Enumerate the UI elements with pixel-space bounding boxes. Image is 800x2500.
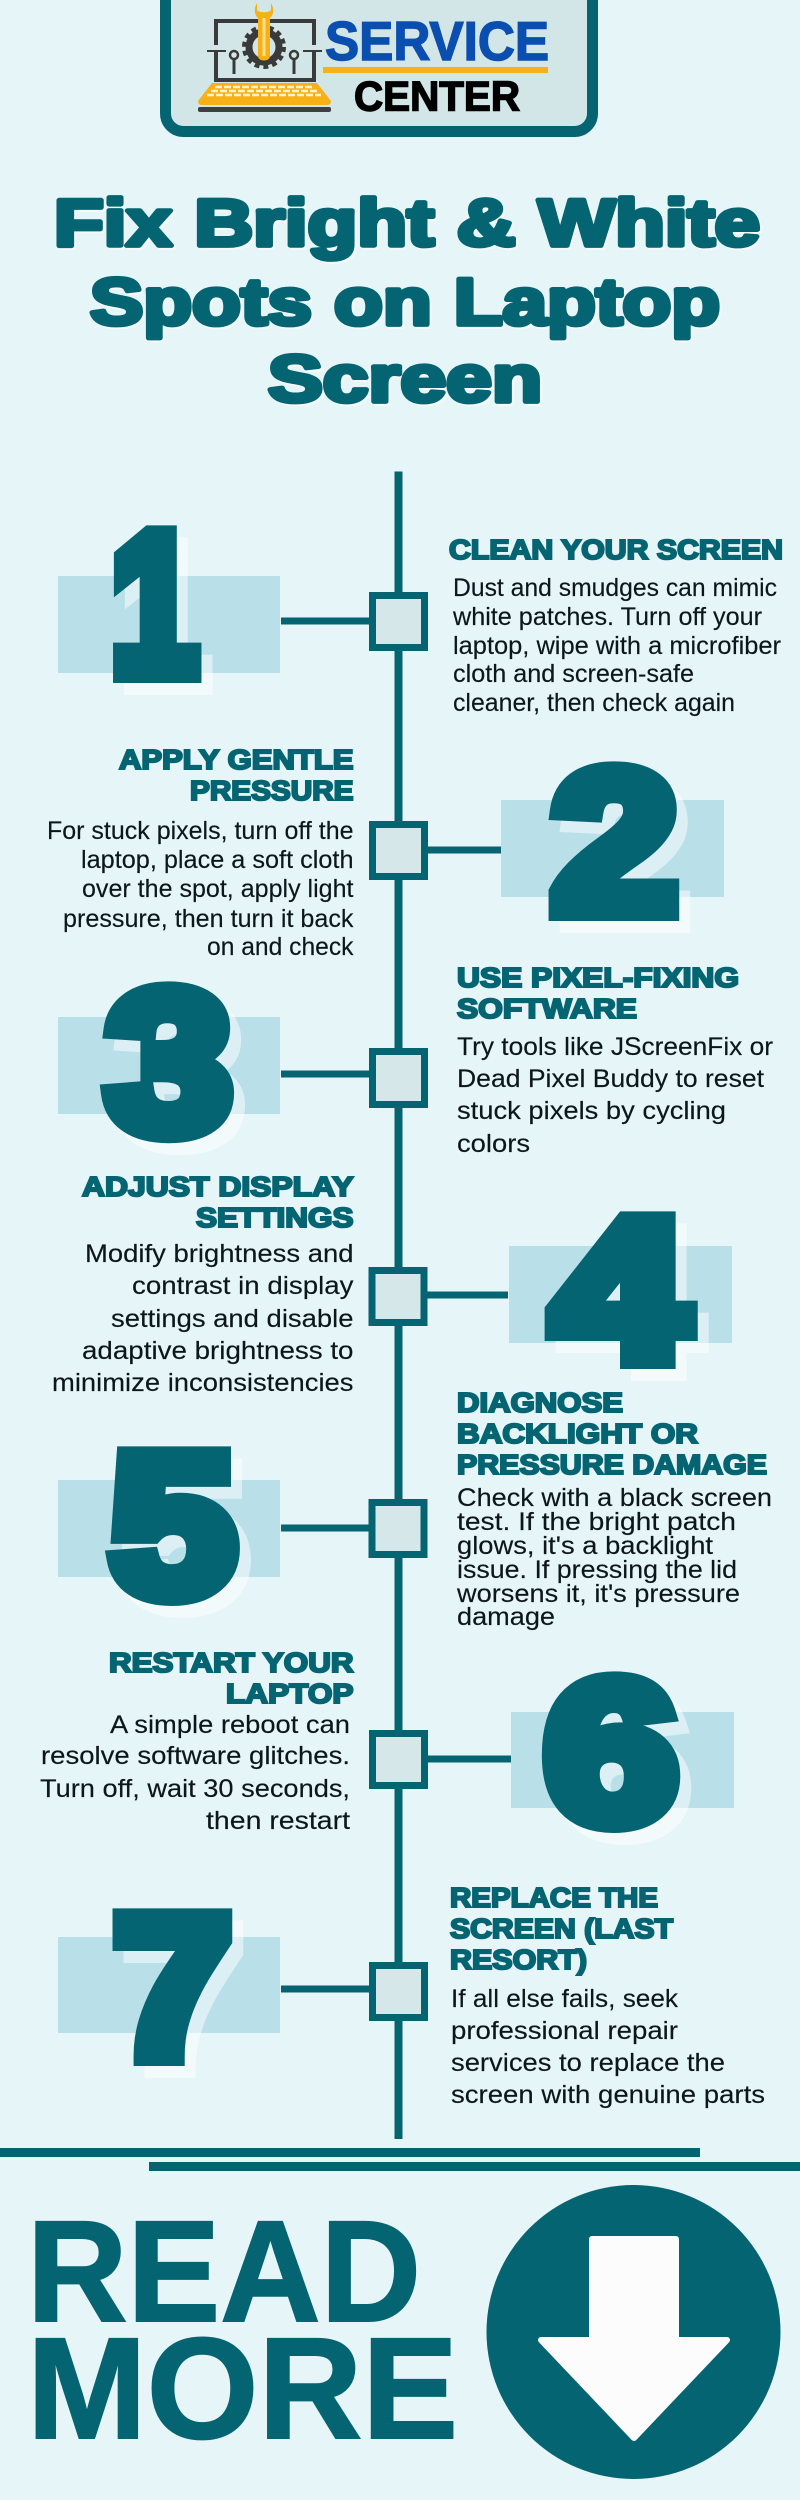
step 1 (58, 493, 783, 717)
heading 5: BACKLIGHT OR (457, 1418, 698, 1449)
body 7: If all else fails, seek (451, 1985, 679, 2013)
body 5: Check with a black screen (457, 1484, 772, 1512)
read more text: MORE (27, 2308, 458, 2469)
body 6: A simple reboot can (110, 1711, 350, 1739)
body 4 (52, 1240, 354, 1397)
read more text: READ (27, 2191, 421, 2352)
body 4: Modify brightness and (85, 1240, 354, 1268)
heading 2: PRESSURE (190, 775, 354, 806)
icon: down arrow in circle (486, 2185, 780, 2479)
node 5 (372, 1502, 424, 1554)
body 3: Try tools like JScreenFix or (457, 1033, 773, 1061)
title: Spots on Laptop (90, 264, 720, 338)
body 4: settings and disable (111, 1305, 354, 1333)
logo gold rule (323, 67, 548, 73)
body 4: minimize inconsistencies (52, 1369, 354, 1397)
timeline vertical line (394, 472, 402, 2139)
step 3 (58, 951, 773, 1174)
number box 6 (511, 1712, 734, 1808)
body 7 (451, 1985, 765, 2109)
number box 4 (509, 1246, 732, 1343)
number 6: 6 (545, 1641, 677, 1864)
body 4: contrast in display (132, 1272, 354, 1300)
number 1: 1 (111, 493, 198, 716)
heading 3 (457, 962, 739, 1024)
body 1: Dust and smudges can mimic (453, 574, 777, 602)
body 1: cleaner, then check again (453, 689, 735, 717)
body 3: colors (457, 1130, 530, 1158)
number box 1 (58, 576, 280, 673)
body 6 (40, 1711, 350, 1835)
connector 5 (281, 1524, 369, 1532)
body 3: stuck pixels by cycling (457, 1097, 726, 1125)
read more text (27, 2191, 458, 2469)
body 1: cloth and screen-safe (453, 660, 694, 688)
connector 6 (428, 1756, 511, 1762)
node 6 (372, 1734, 424, 1786)
number box 2 (501, 800, 724, 897)
number 7: 7 (114, 1876, 231, 2099)
logo badge (166, 0, 592, 132)
title: Fix Bright & White (54, 186, 760, 260)
heading 5: DIAGNOSE (457, 1387, 623, 1418)
heading 3: USE PIXEL-FIXING (457, 962, 739, 993)
step 5 (58, 1387, 772, 1637)
heading 2 (119, 744, 354, 806)
heading 4 (82, 1171, 354, 1233)
number 2: 2 (552, 731, 677, 954)
connector 2 (428, 846, 501, 854)
heading 5 (457, 1387, 767, 1480)
body 2: over the spot, apply light (82, 875, 354, 903)
number box 5 (58, 1480, 280, 1577)
heading 4: ADJUST DISPLAY (82, 1171, 354, 1202)
body 6: Turn off, wait 30 seconds, (40, 1775, 350, 1803)
body 1: laptop, wipe with a microfiber (453, 632, 781, 660)
heading 6: LAPTOP (226, 1678, 354, 1709)
heading 4: SETTINGS (196, 1202, 354, 1233)
heading 7: RESORT) (450, 1944, 587, 1975)
connector 1 (281, 618, 369, 624)
body 2: For stuck pixels, turn off the (47, 817, 354, 845)
body 3 (457, 1033, 773, 1158)
body 5 (456, 1484, 772, 1631)
node 1 (372, 596, 424, 648)
body 6: then restart (206, 1807, 350, 1835)
body 7: services to replace the (451, 2049, 725, 2077)
node 4 (372, 1270, 424, 1322)
body 5: test. If the bright patch (457, 1508, 736, 1536)
logo text: SERVICE: SERVICE (325, 10, 549, 72)
connector 3 (281, 1070, 369, 1078)
heading 7: SCREEN (LAST (450, 1913, 673, 1944)
heading 7: REPLACE THE (450, 1882, 658, 1913)
body 7: professional repair (451, 2017, 678, 2045)
heading 6: RESTART YOUR (109, 1647, 354, 1678)
body 5: worsens it, it's pressure (456, 1580, 740, 1608)
body 2: laptop, place a soft cloth (81, 846, 354, 874)
title: Screen (268, 342, 542, 416)
title (54, 186, 760, 416)
number 5: 5 (111, 1414, 235, 1637)
step 7 (58, 1876, 765, 2109)
number 4: 4 (553, 1179, 687, 1402)
heading 2: APPLY GENTLE (119, 744, 354, 775)
body 2: pressure, then turn it back (63, 905, 354, 933)
heading 6 (109, 1647, 354, 1709)
body 4: adaptive brightness to (82, 1337, 354, 1365)
heading 3: SOFTWARE (457, 993, 637, 1024)
body 5: issue. If pressing the lid (457, 1556, 737, 1584)
node 2 (372, 824, 424, 876)
body 7: screen with genuine parts (451, 2081, 765, 2109)
node 7 (372, 1966, 424, 2018)
step 4 (52, 1171, 732, 1402)
heading 5: PRESSURE DAMAGE (457, 1449, 767, 1480)
body 6: resolve software glitches. (41, 1742, 350, 1770)
step 6 (40, 1641, 734, 1864)
body 1 (452, 574, 781, 717)
heading 7 (450, 1882, 673, 1975)
body 2 (47, 817, 354, 961)
number box 7 (58, 1937, 280, 2033)
logo text: CENTER: CENTER (354, 72, 520, 120)
number 3: 3 (107, 951, 231, 1174)
number box 3 (58, 1017, 280, 1114)
body 2: on and check (207, 933, 354, 961)
body 1: white patches. Turn off your (452, 603, 762, 631)
step 2 (47, 731, 724, 961)
connector 4 (427, 1292, 508, 1298)
heading 1: CLEAN YOUR SCREEN (449, 534, 783, 565)
node 3 (372, 1052, 424, 1104)
connector 7 (281, 1986, 369, 1992)
icon: laptop with wrench and gear (198, 3, 331, 112)
body 5: damage (457, 1603, 555, 1631)
body 5: glows, it's a backlight (457, 1532, 713, 1560)
body 3: Dead Pixel Buddy to reset (457, 1065, 764, 1093)
